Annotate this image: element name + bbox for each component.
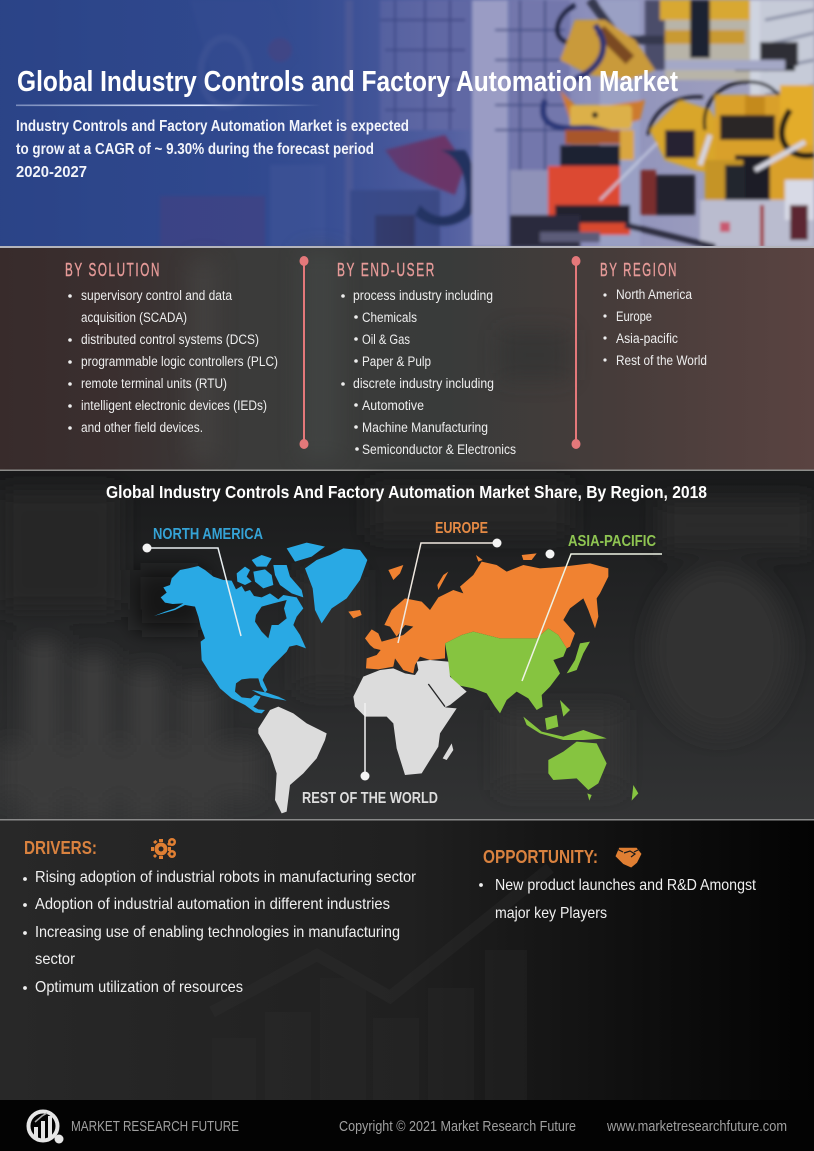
panel: drivers and opportunity bbox=[0, 819, 814, 1100]
callout: rest of the world: REST OF THE WORLD bbox=[302, 790, 438, 807]
subtitle: to grow at a CAGR of ~ 9.30% during the forecast period bbox=[16, 141, 374, 158]
subtitle bbox=[16, 118, 409, 181]
heading: OPPORTUNITY: bbox=[483, 847, 598, 867]
factory photo backdrop bbox=[160, 0, 814, 247]
heading: BY END-USER bbox=[337, 260, 436, 280]
region: africa and middle east bbox=[353, 660, 467, 775]
icon: handshake bbox=[617, 849, 640, 866]
callout: asia-pacific bbox=[522, 533, 662, 681]
footer bbox=[0, 1100, 814, 1151]
copyright: Copyright © 2021 Market Research Future bbox=[339, 1119, 576, 1135]
list: Automotive bbox=[362, 398, 424, 413]
list: major key Players bbox=[495, 905, 607, 922]
list bbox=[479, 877, 756, 922]
list: discrete industry including bbox=[353, 376, 494, 391]
callout: north america bbox=[142, 526, 263, 636]
list: intelligent electronic devices (IEDs) bbox=[81, 398, 267, 413]
column: by end-user bbox=[337, 260, 516, 457]
title: Global Industry Controls and Factory Automation Market bbox=[17, 66, 678, 98]
list: Paper & Pulp bbox=[362, 354, 431, 369]
list: acquisition (SCADA) bbox=[81, 310, 187, 325]
heading: BY SOLUTION bbox=[65, 260, 161, 280]
list: Rest of the World bbox=[616, 353, 707, 368]
list bbox=[603, 287, 707, 368]
opportunity block bbox=[479, 847, 756, 922]
list: Adoption of industrial automation in different industries bbox=[35, 896, 390, 913]
panel: header banner bbox=[0, 0, 814, 247]
drivers block bbox=[23, 838, 417, 996]
callout: europe: EUROPE bbox=[435, 520, 488, 537]
list bbox=[68, 288, 278, 435]
region: europe and russia bbox=[348, 553, 608, 673]
region: south america bbox=[258, 707, 327, 813]
callout: rest of the world bbox=[302, 703, 438, 807]
subtitle: Industry Controls and Factory Automation Market is expected bbox=[16, 118, 409, 135]
list: Chemicals bbox=[362, 310, 417, 325]
list: Rising adoption of industrial robots in manufacturing sector bbox=[35, 869, 417, 886]
background chart watermark bbox=[212, 868, 550, 1100]
column: by solution bbox=[65, 260, 278, 435]
heading: BY REGION bbox=[600, 260, 678, 280]
callout: asia-pacific: ASIA-PACIFIC bbox=[568, 533, 656, 550]
website: www.marketresearchfuture.com bbox=[606, 1119, 787, 1135]
list: Semiconductor & Electronics bbox=[362, 442, 516, 457]
map title: Global Industry Controls And Factory Automation Market Share, By Region, 2018 bbox=[106, 482, 707, 502]
panel: regional map bbox=[0, 471, 814, 820]
list: programmable logic controllers (PLC) bbox=[81, 354, 278, 369]
list: remote terminal units (RTU) bbox=[81, 376, 227, 391]
brand name: MARKET RESEARCH FUTURE bbox=[71, 1119, 239, 1135]
callout: europe bbox=[398, 520, 502, 643]
region: asia-pacific bbox=[445, 628, 638, 801]
logo bbox=[28, 1112, 64, 1144]
column: by region bbox=[600, 260, 707, 368]
list: Optimum utilization of resources bbox=[35, 979, 243, 996]
divider left bbox=[300, 256, 308, 449]
list bbox=[341, 288, 516, 457]
list: distributed control systems (DCS) bbox=[81, 332, 259, 347]
list: sector bbox=[35, 951, 76, 968]
list: New product launches and R&D Amongst bbox=[495, 877, 756, 894]
list: Europe bbox=[616, 309, 652, 324]
heading: DRIVERS: bbox=[24, 838, 97, 858]
panel: segmentation bbox=[0, 246, 814, 471]
region: north america bbox=[154, 543, 367, 713]
subtitle: 2020-2027 bbox=[16, 164, 87, 181]
divider right bbox=[572, 256, 580, 449]
list: Machine Manufacturing bbox=[362, 420, 488, 435]
list: Oil & Gas bbox=[362, 332, 410, 347]
list bbox=[23, 869, 417, 996]
list: supervisory control and data bbox=[81, 288, 232, 303]
list: Asia-pacific bbox=[616, 331, 678, 346]
icon: gears bbox=[151, 838, 176, 859]
callout: north america: NORTH AMERICA bbox=[153, 526, 263, 543]
list: North America bbox=[616, 287, 692, 302]
list: and other field devices. bbox=[81, 420, 203, 435]
list: process industry including bbox=[353, 288, 493, 303]
world map bbox=[154, 543, 638, 813]
list: Increasing use of enabling technologies in manufacturing bbox=[35, 924, 400, 941]
